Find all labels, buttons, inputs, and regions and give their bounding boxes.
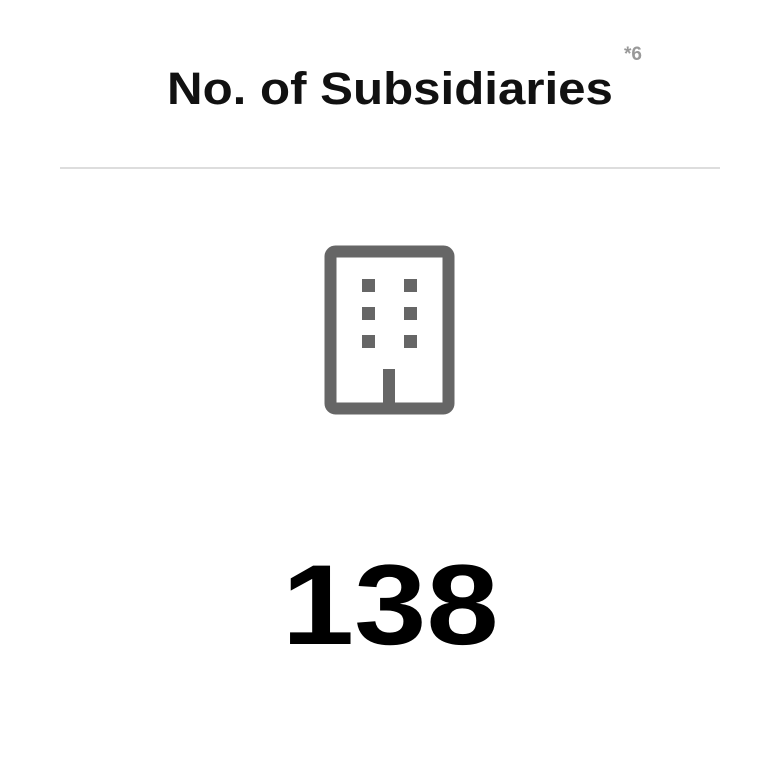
title: No. of Subsidiaries	[167, 63, 613, 114]
footnote marker: *6	[624, 44, 642, 65]
number: 138: 138	[282, 542, 499, 669]
